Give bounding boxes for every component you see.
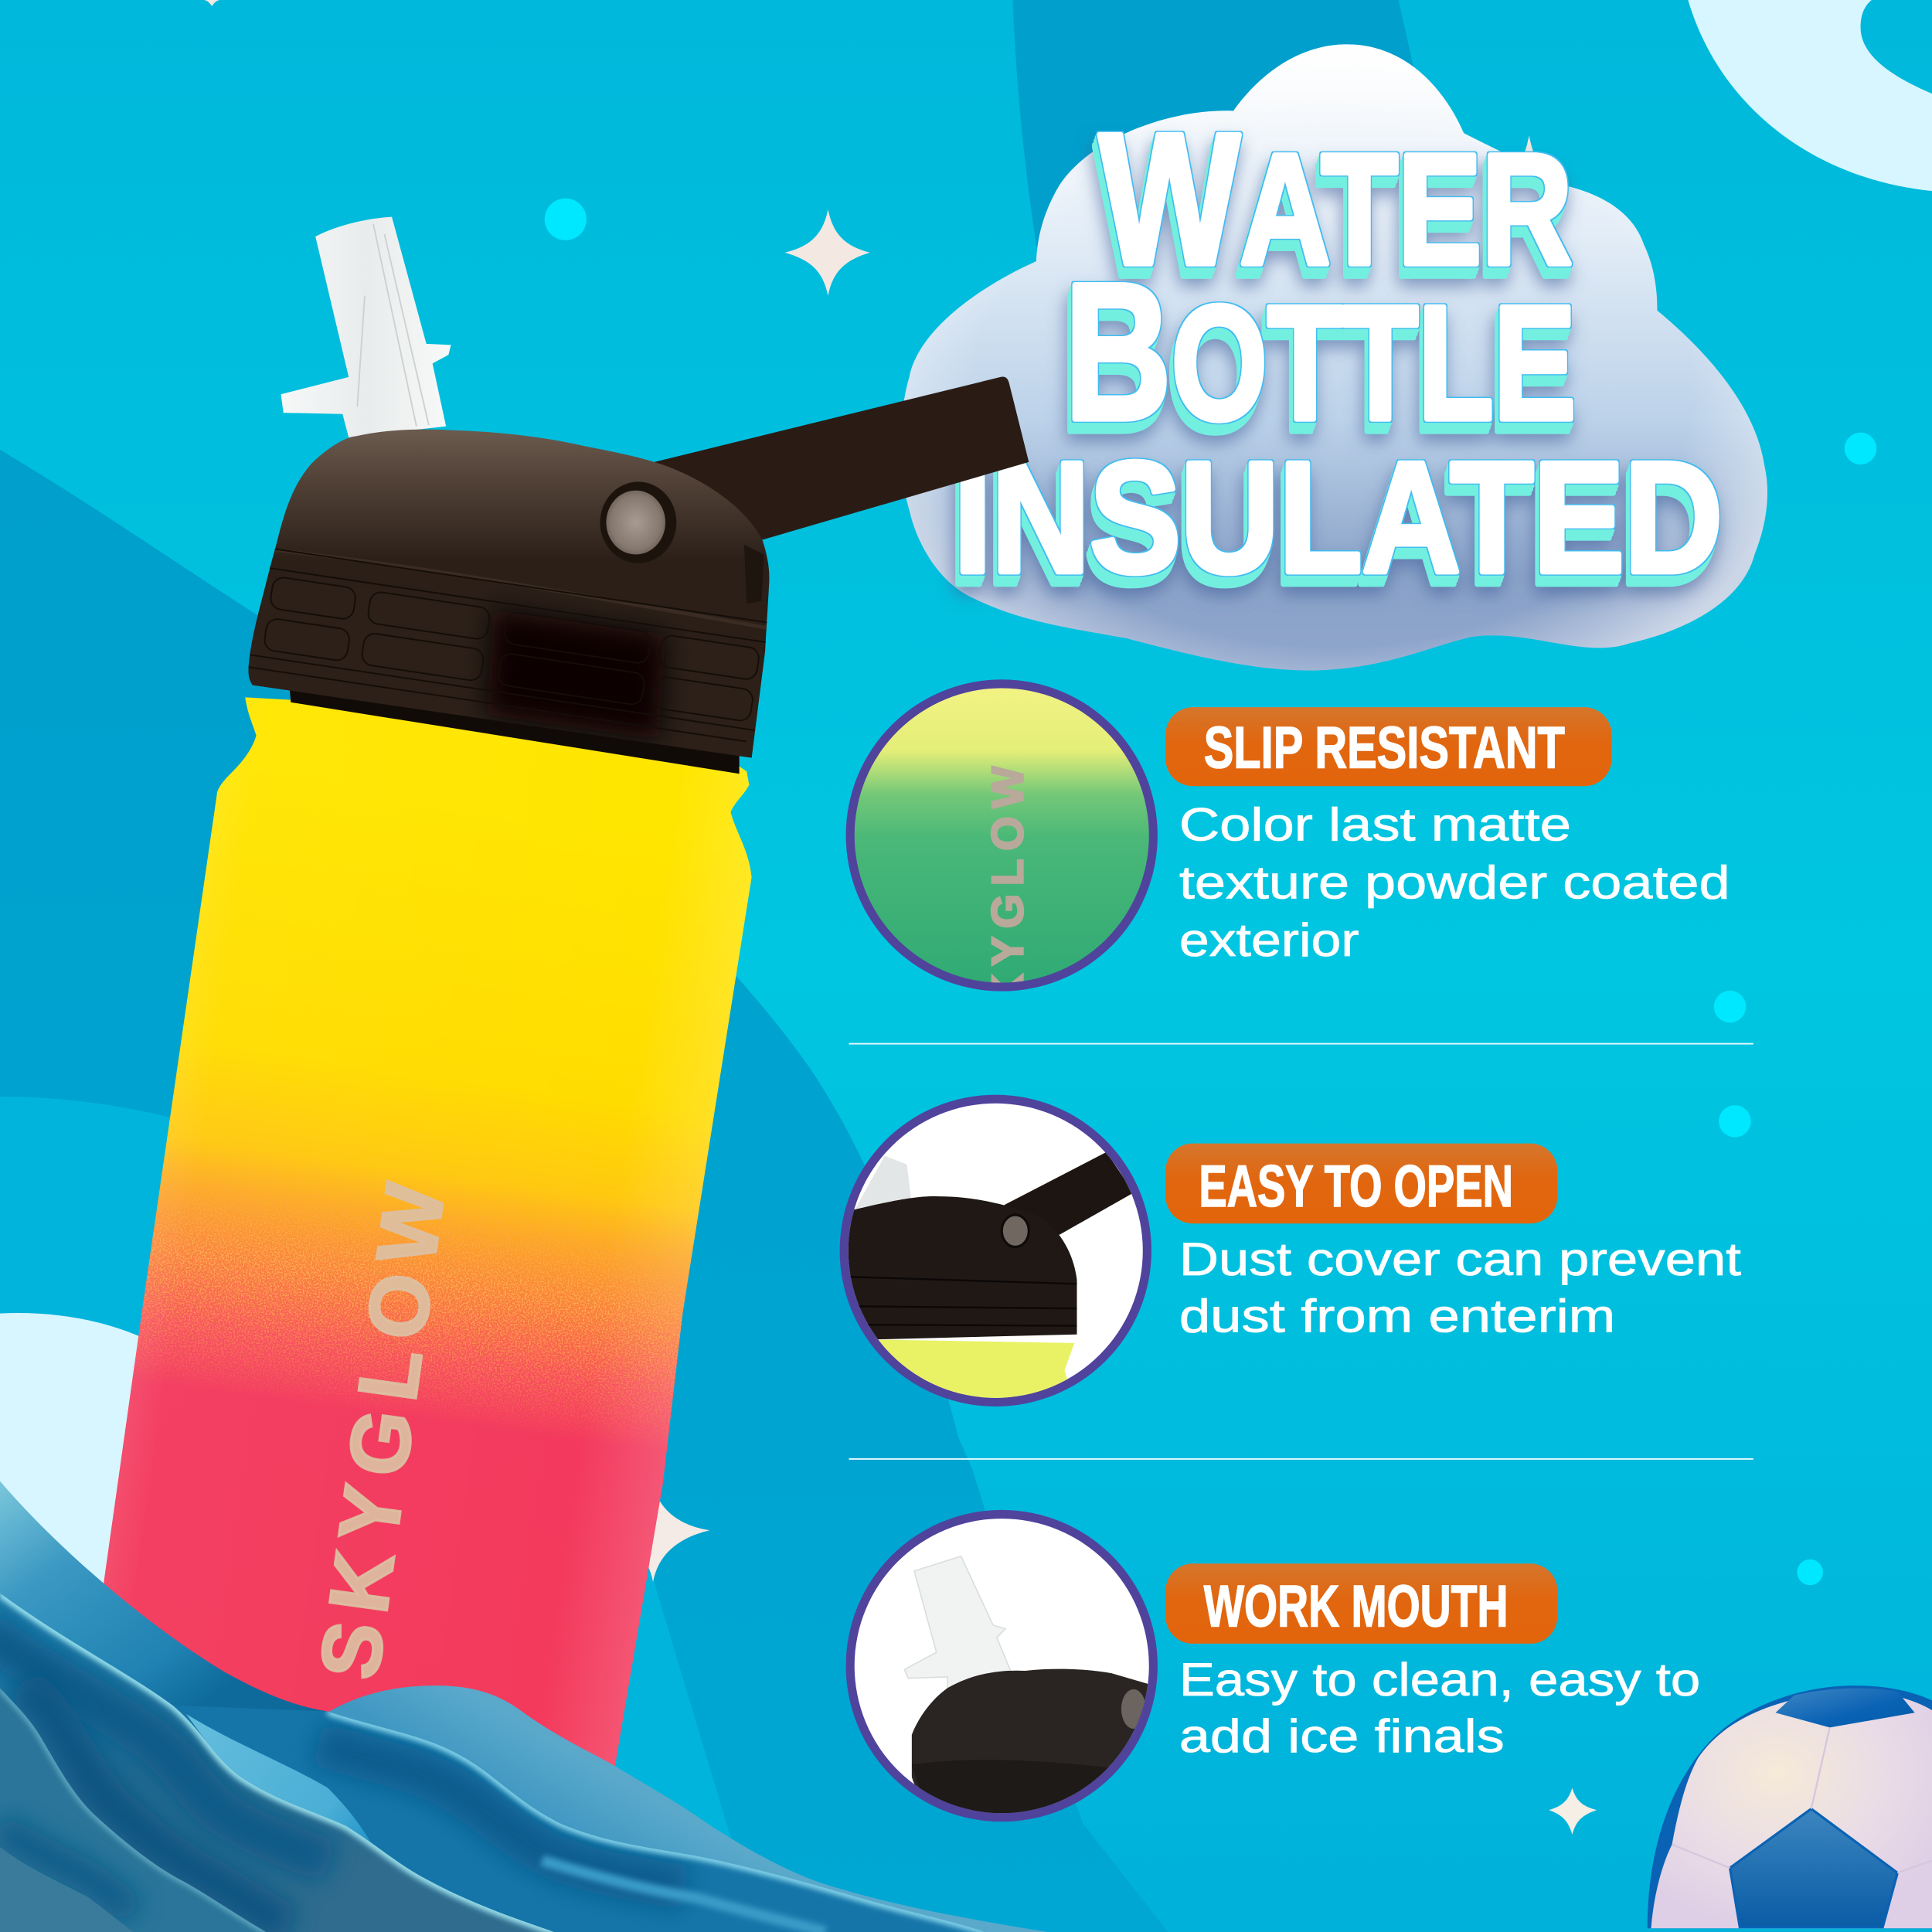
wave: bump xyxy=(323,1685,1047,1932)
ball seams xyxy=(1672,1727,1932,1872)
mini cap xyxy=(912,1669,1171,1824)
dot: right of first feature xyxy=(1714,991,1746,1022)
bottle cap xyxy=(249,430,769,758)
background shape: lighter lower-left sweep xyxy=(0,1097,752,1932)
waves xyxy=(0,1481,1047,1932)
feature 2 description: dust from enterim xyxy=(1179,1290,1615,1342)
wave: bottom fold xyxy=(0,1847,133,1932)
dot: upper xyxy=(545,199,587,240)
soccer ball xyxy=(1648,1685,1932,1928)
mini handle xyxy=(1004,1152,1134,1235)
title line: Bottle: BOTTLE xyxy=(1065,243,1576,461)
feature 2 pill xyxy=(1165,1144,1557,1223)
bottle straw xyxy=(281,217,451,437)
feature 1 description xyxy=(1179,798,1730,966)
bottle colour spray band xyxy=(134,1159,697,1437)
feature 1 pill xyxy=(1165,707,1611,786)
feature 1 brand text: SKYGLOW xyxy=(983,766,1032,1043)
title line: Water: WATER xyxy=(1099,95,1572,304)
bottle body xyxy=(101,697,752,1774)
divider xyxy=(849,1458,1753,1460)
title line: Insulated: INSULATED xyxy=(954,430,1723,606)
bottle xyxy=(87,217,1029,1774)
cap side slot xyxy=(744,545,764,604)
sparkle: behind cloud xyxy=(1505,135,1555,179)
feature 2 heading: EASY TO OPEN xyxy=(1199,1154,1513,1219)
background shape: pale blob bottom left xyxy=(0,1313,154,1725)
cap pin xyxy=(600,481,676,563)
feature 2 description xyxy=(1179,1233,1741,1342)
sparkle: top edge xyxy=(203,0,220,6)
feature 3 description: add ice finals xyxy=(1179,1709,1505,1762)
mini cap band xyxy=(912,1760,1158,1824)
wave: lower fold xyxy=(0,1688,266,1932)
feature 2 circle: cap with dust cover xyxy=(838,1095,1158,1406)
background shape: pale ring top right xyxy=(1688,0,1932,191)
wave: light patch xyxy=(186,1714,425,1897)
mini cap xyxy=(838,1196,1077,1339)
feature 1 description: Color last matte xyxy=(1179,798,1571,850)
feature 1 circle: matte texture xyxy=(838,679,1171,1043)
mini yellow neck xyxy=(850,1339,1074,1405)
wave: middle fold xyxy=(0,1594,554,1932)
cloud xyxy=(900,44,1767,671)
background shape: dark sweeping arc left xyxy=(0,450,1168,1932)
bottle edge shading xyxy=(101,697,752,1774)
bottle handle xyxy=(655,376,1029,543)
wave: front ridge fold xyxy=(123,1706,986,1932)
bottle brand text: SKYGLOW xyxy=(302,1178,462,1684)
dot: right of second feature xyxy=(1719,1105,1751,1138)
ball bottom pentagon xyxy=(1730,1809,1897,1927)
bottle neck shadow xyxy=(290,688,740,774)
ball blue rim xyxy=(1648,1685,1932,1928)
feature 3 description: Easy to clean, easy to xyxy=(1179,1653,1700,1706)
wave: back fold xyxy=(0,1481,493,1932)
title xyxy=(954,95,1723,606)
mini pin xyxy=(1002,1215,1029,1247)
dot: right of third feature xyxy=(1797,1560,1823,1585)
sparkle: upper middle xyxy=(785,209,870,296)
cap band and grips xyxy=(235,546,777,764)
ball pale panels xyxy=(1651,1691,1932,1928)
sparkle: next to bottle xyxy=(604,1484,709,1582)
mini straw xyxy=(852,1156,912,1213)
dot: right of cloud xyxy=(1845,433,1876,464)
feature 3 circle: mouthpiece xyxy=(838,1510,1171,1825)
feature 3 heading: WORK MOUTH xyxy=(1204,1574,1509,1640)
background shape: dark band behind cloud xyxy=(1013,0,1423,369)
mini straw xyxy=(904,1556,1012,1689)
divider xyxy=(849,1043,1753,1045)
mini pin xyxy=(1121,1689,1146,1729)
feature 2 description: Dust cover can prevent xyxy=(1179,1233,1741,1285)
ball top hexagon xyxy=(1776,1689,1915,1727)
feature 1 heading: SLIP RESISTANT xyxy=(1204,715,1565,781)
mini band lines xyxy=(838,1277,1077,1326)
feature 1 description: exterior xyxy=(1179,913,1359,966)
feature 3 description xyxy=(1179,1653,1700,1762)
feature 1 description: texture powder coated xyxy=(1179,855,1730,908)
feature 3 pill xyxy=(1165,1563,1557,1644)
sparkle: lower right xyxy=(1549,1787,1597,1835)
